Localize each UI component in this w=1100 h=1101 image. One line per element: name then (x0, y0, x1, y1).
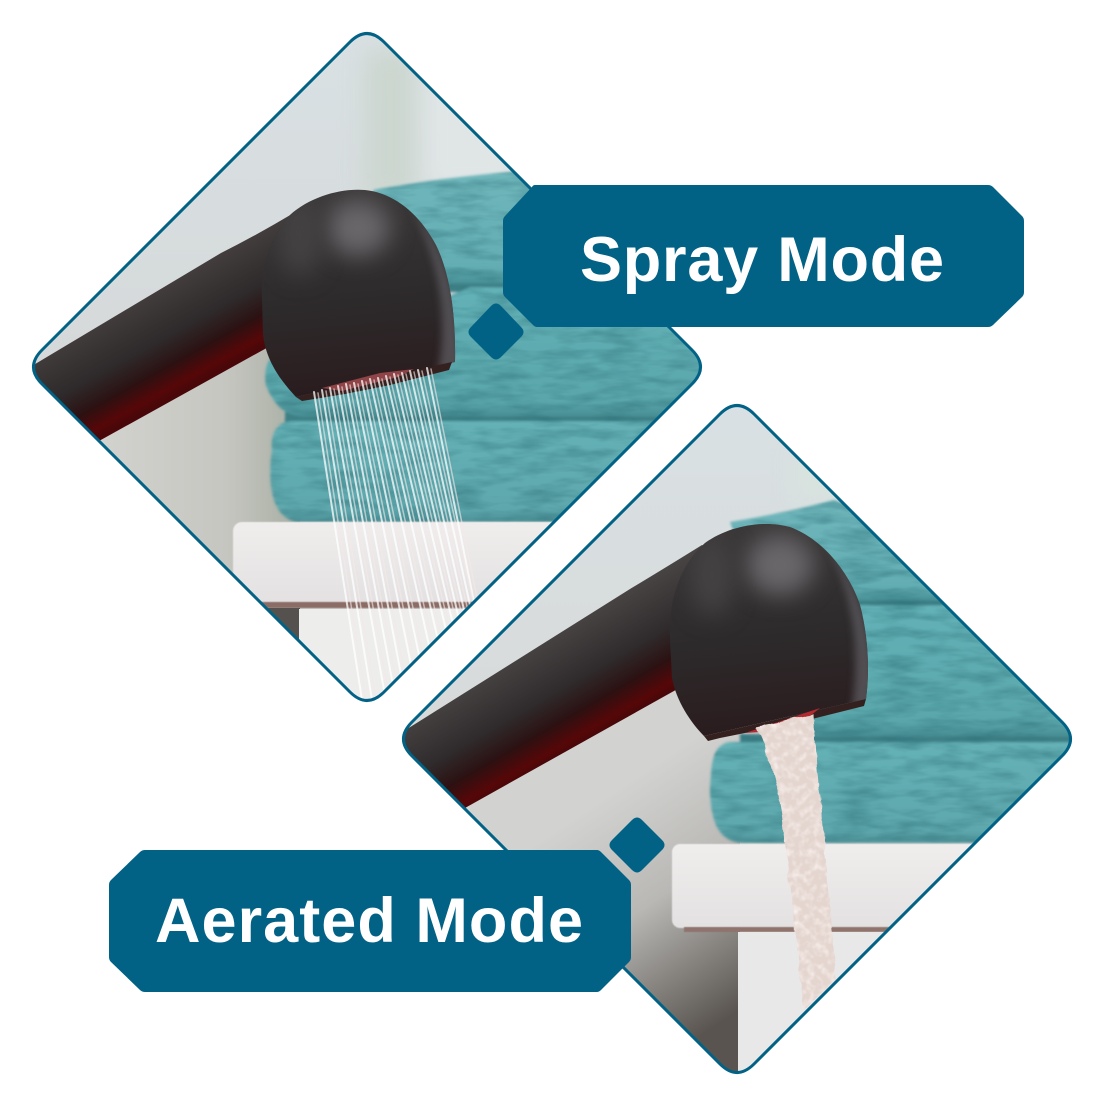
head highlight (746, 535, 814, 595)
table leg (268, 608, 300, 639)
photo border (34, 34, 700, 700)
callout heading: Spray Mode (580, 225, 944, 295)
faucet arm (35, 215, 290, 440)
wall below faucet (524, 690, 740, 1071)
faucet arm (405, 545, 702, 808)
callout: aerated mode (109, 850, 631, 992)
table shadow line (684, 926, 890, 932)
blurred window backdrop (795, 450, 845, 500)
white table top (232, 521, 552, 602)
towel stack (265, 170, 720, 522)
wall below faucet (102, 348, 300, 608)
icon: small diamond, spray mode (468, 304, 524, 360)
head highlight (326, 200, 390, 256)
table leg (738, 932, 884, 1071)
top left sheen (690, 535, 734, 615)
callout background (503, 185, 1024, 327)
panel: aerated mode photo (380, 390, 1090, 1090)
right edge sheen (831, 556, 868, 702)
table shadow line (255, 602, 555, 608)
water stream (756, 714, 836, 1010)
aerator rim (704, 699, 866, 741)
callout: spray mode (503, 185, 1024, 327)
faucet head (262, 190, 456, 397)
spray jets (314, 368, 478, 701)
callout background (109, 850, 631, 992)
photo background (409, 407, 974, 932)
photo background (36, 35, 552, 609)
right edge sheen (416, 219, 455, 366)
aerator rim (296, 362, 452, 401)
faucet head (670, 524, 868, 736)
callout heading: Aerated Mode (155, 886, 583, 956)
top left sheen (280, 198, 316, 272)
photo border (404, 406, 1070, 1072)
towel stack (710, 500, 1090, 843)
panel: spray mode photo (32, 32, 702, 702)
white table top (672, 844, 972, 928)
blurred window backdrop (365, 50, 515, 200)
icon: small diamond, aerated mode (610, 818, 664, 872)
